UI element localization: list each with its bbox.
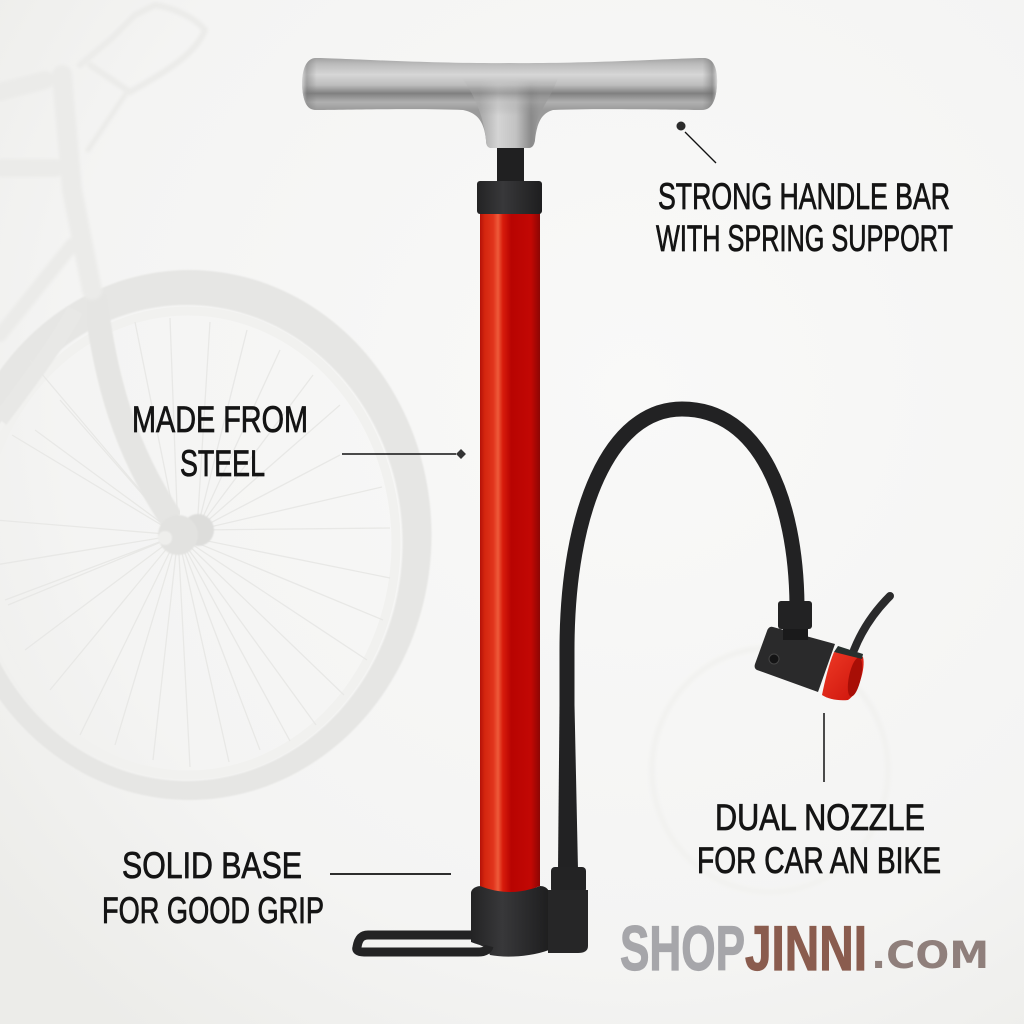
logo: JINNI <box>745 914 867 984</box>
ghost wheel spokes <box>0 318 390 767</box>
nozzle callout label: DUAL NOZZLE <box>715 797 925 838</box>
ghost hub <box>158 514 214 555</box>
ghost small tyre <box>652 648 888 892</box>
steel callout label: STEEL <box>180 443 265 484</box>
base callout label <box>102 845 324 931</box>
steel callout label <box>132 399 308 484</box>
nozzle callout label: FOR CAR AN BIKE <box>697 840 941 881</box>
ghost frame and handlebar <box>0 5 205 335</box>
red cap <box>822 652 864 700</box>
base block <box>471 886 549 957</box>
dual nozzle head <box>755 596 890 700</box>
hose <box>558 409 797 870</box>
ghost bicycle illustration <box>0 5 888 892</box>
nozzle callout line <box>823 713 825 782</box>
nozzle lever <box>854 596 890 650</box>
hose connector <box>778 601 812 640</box>
barrel <box>480 205 540 892</box>
screw <box>769 654 779 664</box>
base callout label: FOR GOOD GRIP <box>102 890 324 931</box>
logo: .COM <box>871 934 989 977</box>
cap clip <box>834 646 863 659</box>
handle callout marker <box>676 122 716 163</box>
callout: base <box>102 845 451 931</box>
nozzle body <box>755 627 835 692</box>
ghost wheel rim <box>0 311 396 775</box>
ghost fork <box>95 295 172 520</box>
logo: SHOP <box>620 914 745 984</box>
base callout line <box>330 873 451 875</box>
ghost wheel tyre <box>0 270 432 800</box>
base callout label: SOLID BASE <box>122 845 302 886</box>
steel callout label: MADE FROM <box>132 399 308 440</box>
piston rod <box>497 146 524 184</box>
floor pump <box>302 58 797 957</box>
handle grip <box>302 58 717 148</box>
handle end shading <box>302 58 717 110</box>
handle callout label <box>656 176 953 259</box>
hose collar <box>548 867 588 953</box>
cap opening <box>845 656 865 698</box>
steel callout marker <box>342 449 466 459</box>
logo <box>620 914 989 984</box>
foot rest <box>357 935 489 952</box>
top collar <box>477 181 542 214</box>
callout: steel <box>132 399 466 484</box>
callout: nozzle <box>697 713 941 881</box>
handle <box>302 58 717 148</box>
nozzle callout label <box>697 797 941 881</box>
callout: handle <box>656 122 953 259</box>
handle stem <box>471 84 551 148</box>
